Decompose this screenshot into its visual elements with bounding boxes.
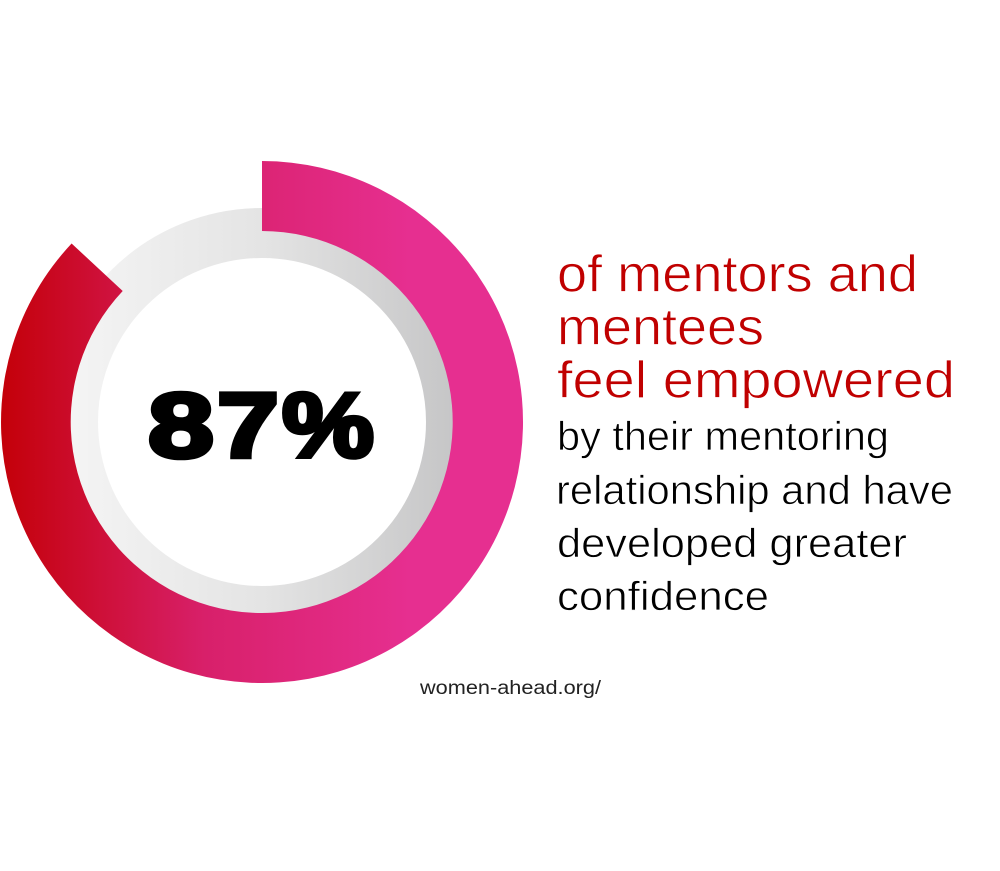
percentage value: 7 bbox=[217, 375, 279, 477]
black body text bbox=[556, 413, 953, 619]
red headline: feel empowered bbox=[557, 352, 955, 410]
pink 87% arc bbox=[1, 161, 523, 683]
percentage value bbox=[148, 375, 374, 477]
black body text: confidence bbox=[557, 573, 769, 619]
percentage value: % bbox=[282, 375, 374, 477]
donut chart bbox=[1, 161, 523, 683]
gray background ring bbox=[73, 233, 451, 611]
red headline: of mentors and bbox=[557, 246, 918, 304]
red headline bbox=[557, 246, 955, 410]
black body text: by their mentoring bbox=[557, 413, 889, 459]
source credit: women-ahead.org/ bbox=[419, 678, 602, 699]
percentage value: 8 bbox=[148, 375, 214, 477]
black body text: relationship and have bbox=[556, 467, 953, 513]
black body text: developed greater bbox=[557, 520, 907, 566]
red headline: mentees bbox=[557, 298, 764, 356]
